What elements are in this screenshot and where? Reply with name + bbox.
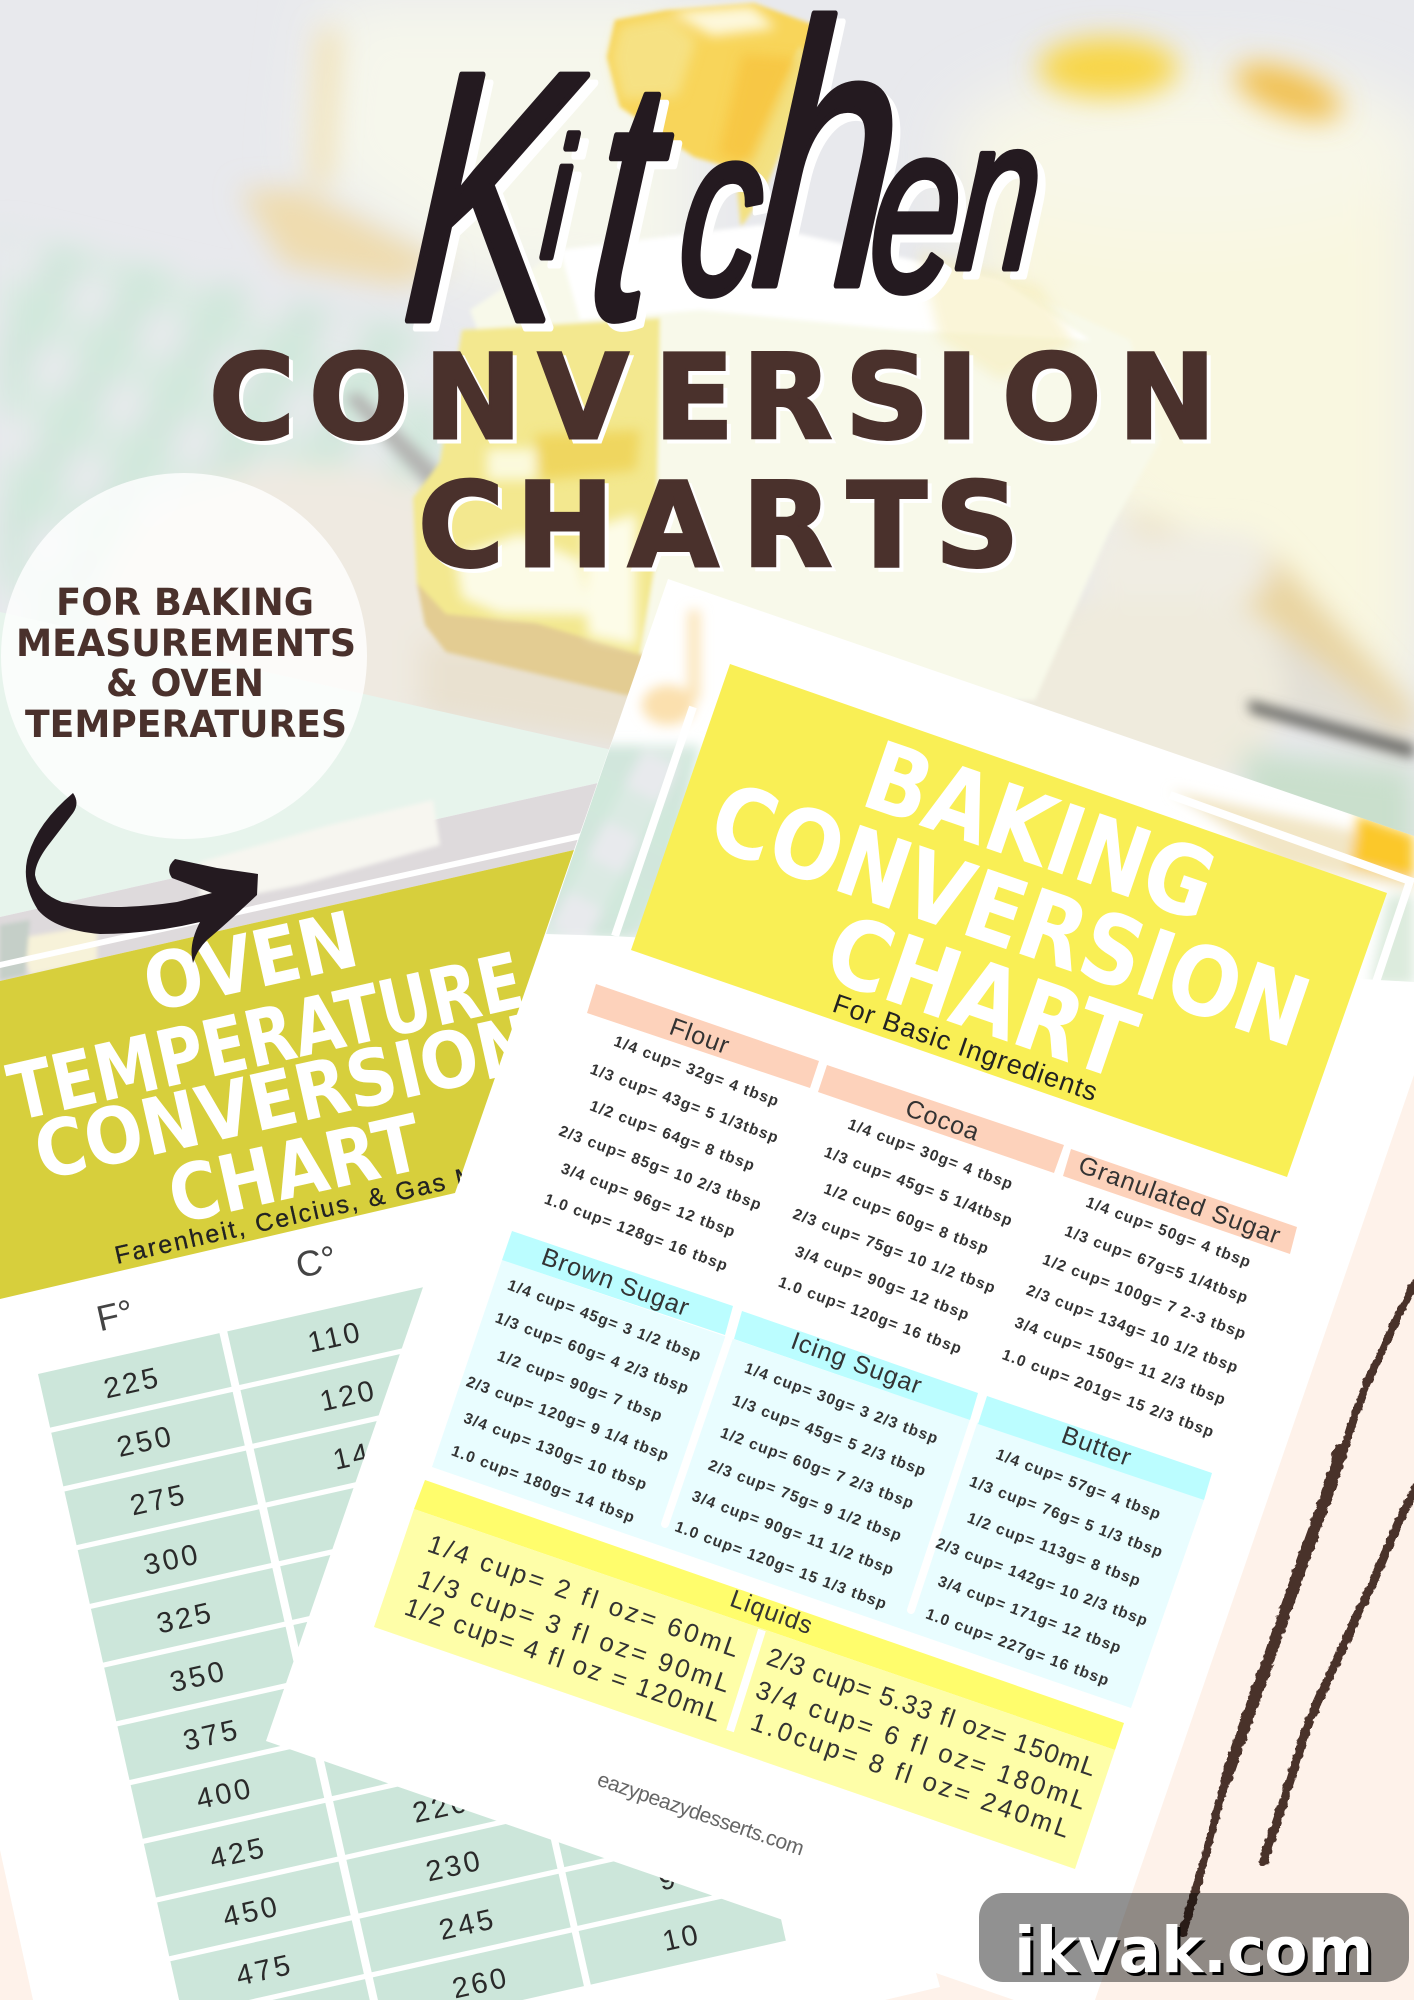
section: flour: Flour	[666, 1013, 734, 1060]
oven temperature table: 200	[396, 1727, 459, 1770]
title: Kitchen: e	[861, 73, 974, 342]
section: liquids	[374, 1480, 1124, 1869]
section: brown sugar: 1/3 cup= 60g= 4 2/3 tbsp	[493, 1310, 692, 1398]
website credit: eazypeazydesserts.com	[594, 1768, 807, 1860]
oven chart title text: CONVERSION	[26, 999, 544, 1199]
oven temperature table: 190	[383, 1668, 446, 1712]
decorative brush strokes	[1183, 1282, 1414, 1933]
section: granulated sugar: 1/3 cup= 67g=5 1/4tbsp	[1062, 1223, 1251, 1307]
callout circle: for baking measurements and oven temperatures	[1, 473, 367, 839]
section: granulated sugar: 1/4 cup= 50g= 4 tbsp	[1083, 1194, 1254, 1271]
baking title text: BAKING	[851, 720, 1229, 944]
title: conversion charts	[209, 329, 1216, 594]
oven temperature table: 350	[167, 1655, 230, 1699]
section: cocoa: Cocoa	[902, 1094, 984, 1147]
oven temperature table: 245	[436, 1903, 499, 1947]
oven temperature table: F°	[93, 1291, 137, 1339]
oven chart title text: CHART	[160, 1098, 430, 1243]
oven temperature table: 180	[370, 1609, 433, 1653]
oven chart subtitle: Farenheit, Celcius, & Gas Mark	[112, 1152, 522, 1270]
background photo: blurred cake	[0, 0, 1414, 1000]
section: granulated sugar: 1/2 cup= 100g= 7 2-3 tbsp	[1040, 1251, 1249, 1343]
title: Kitchen: n	[950, 74, 1052, 314]
baking title text: CONVERSION	[697, 761, 1323, 1070]
oven temperature table: 160	[357, 1551, 420, 1595]
section: flour: 3/4 cup= 96g= 12 tbsp	[559, 1160, 738, 1241]
section: granulated sugar	[1000, 1149, 1297, 1441]
oven temperature table: 140	[330, 1433, 393, 1477]
section: brown sugar: Brown Sugar	[538, 1243, 694, 1322]
section: cocoa: 3/4 cup= 90g= 12 tbsp	[793, 1243, 972, 1324]
oven temperature table: 475	[233, 1949, 296, 1993]
oven temperature table: 275	[127, 1479, 190, 1522]
title: conversion charts: CHARTS	[418, 457, 1019, 594]
section: cocoa: 1/4 cup= 30g= 4 tbsp	[845, 1116, 1016, 1193]
photo inner frame line	[615, 707, 693, 936]
title: Kitchen: i	[536, 103, 582, 293]
mint background panel	[0, 612, 612, 920]
oven temperature table: 220	[410, 1786, 473, 1830]
oven temperature table: 300	[141, 1538, 204, 1582]
section: liquids: 3/4 cup= 6 fl oz= 180mL	[752, 1674, 1090, 1816]
section: butter: 1.0 cup= 227g= 16 tbsp	[923, 1606, 1112, 1690]
title: conversion charts: CONVERSION	[209, 329, 1216, 466]
section: icing sugar: 1/4 cup= 30g= 3 2/3 tbsp	[742, 1360, 941, 1448]
oven temperature table: 425	[207, 1832, 270, 1876]
callout circle: for baking measurements and oven temperatures: & OVEN	[106, 662, 264, 705]
oven chart title text: OVEN	[135, 895, 366, 1031]
section: brown sugar: 1/2 cup= 90g= 7 tbsp	[495, 1348, 665, 1425]
oven temperature table: 225	[101, 1362, 164, 1405]
oven temperature table	[23, 1174, 786, 2000]
baking sheet photo band	[540, 610, 1414, 985]
section: brown sugar	[439, 1231, 733, 1530]
oven temperature table: 150	[344, 1492, 407, 1536]
section: cocoa: 1/2 cup= 60g= 8 tbsp	[821, 1181, 992, 1258]
oven temperature table: 325	[154, 1597, 217, 1641]
section: cocoa: 1.0 cup= 120g= 16 tbsp	[776, 1274, 965, 1358]
oven temperature table: C°	[292, 1237, 340, 1286]
section: brown sugar: 3/4 cup= 130g= 10 tbsp	[461, 1410, 650, 1494]
pale blue ingredient panel	[432, 1260, 1204, 1708]
section: granulated sugar: 1.0 cup= 201g= 15 2/3 tbsp	[1000, 1346, 1217, 1441]
section: flour: 1/4 cup= 32g= 4 tbsp	[611, 1033, 782, 1110]
section: flour: 1/2 cup= 64g= 8 tbsp	[587, 1098, 758, 1175]
callout circle: for baking measurements and oven temperatures: MEASUREMENTS	[16, 622, 356, 665]
oven temperature table: 250	[114, 1420, 177, 1464]
oven sheet photo strip	[0, 783, 598, 981]
title: Kitchen: t	[578, 6, 684, 390]
section: butter: 3/4 cup= 171g= 12 tbsp	[936, 1573, 1124, 1657]
baking subtitle: For Basic Ingredients	[829, 988, 1103, 1108]
oven temperature table: 110	[305, 1316, 366, 1359]
section: flour: 2/3 cup= 85g= 10 2/3 tbsp	[556, 1123, 764, 1214]
oven chart title text: TEMPERATURE	[0, 937, 531, 1140]
section: granulated sugar: 2/3 cup= 134g= 10 1/2 tbsp	[1024, 1282, 1241, 1377]
watermark: ikvak.com	[1014, 1914, 1373, 1987]
section: granulated sugar: 3/4 cup= 150g= 11 2/3 tbsp	[1012, 1314, 1229, 1409]
oven chart title banner	[0, 850, 574, 1299]
section: brown sugar: 1/4 cup= 45g= 3 1/2 tbsp	[505, 1277, 704, 1365]
section: cocoa: 2/3 cup= 75g= 10 1/2 tbsp	[790, 1206, 998, 1297]
oven temperature table: 230	[423, 1845, 486, 1888]
section: icing sugar: 1/2 cup= 60g= 7 2/3 tbsp	[718, 1425, 917, 1513]
section: butter: 1/4 cup= 57g= 4 tbsp	[993, 1446, 1164, 1523]
section: butter: 2/3 cup= 142g= 10 2/3 tbsp	[933, 1535, 1151, 1630]
section: icing sugar: 2/3 cup= 75g= 9 1/2 tbsp	[706, 1457, 905, 1545]
section: liquids: 1/4 cup= 2 fl oz= 60mL	[424, 1528, 743, 1663]
section: liquids: 1.0cup= 8 fl oz= 240mL	[747, 1706, 1074, 1844]
oven chart title text	[0, 895, 544, 1243]
callout circle: for baking measurements and oven temperatures: FOR BAKING	[56, 581, 314, 624]
section: cocoa: 1/3 cup= 45g= 5 1/4tbsp	[822, 1144, 1015, 1230]
section: liquids: Liquids	[726, 1585, 817, 1640]
oven temperature table: 10	[660, 1918, 704, 1958]
title: Kitchen	[393, 0, 1063, 396]
section: cocoa	[766, 1065, 1064, 1362]
section: liquids: 1/2 cup= 4 fl oz = 120mL	[401, 1591, 725, 1728]
section: icing sugar: Icing Sugar	[787, 1327, 926, 1400]
section: butter: 1/2 cup= 113g= 8 tbsp	[965, 1510, 1144, 1590]
peach background panel	[0, 1000, 1414, 2000]
section: granulated sugar: Granulated Sugar	[1075, 1151, 1285, 1250]
oven temperature table: 400	[193, 1772, 256, 1816]
section: butter: Butter	[1058, 1421, 1136, 1472]
title: Kitchen: K	[393, 0, 599, 396]
section: icing sugar	[672, 1311, 978, 1613]
panel: oven temperature conversion chart sheet	[0, 783, 940, 2000]
section: icing sugar: 1.0 cup= 120g= 15 1/3 tbsp	[672, 1518, 890, 1613]
arrow pointing to the oven chart	[26, 793, 258, 963]
section: flour: 1.0 cup= 128g= 16 tbsp	[542, 1191, 731, 1275]
section: flour	[532, 984, 819, 1279]
section: brown sugar: 1.0 cup= 180g= 14 tbsp	[449, 1443, 638, 1527]
baking title text: CHART	[813, 893, 1150, 1102]
section: icing sugar: 1/3 cup= 45g= 5 2/3 tbsp	[730, 1392, 929, 1480]
oven temperature table: 120	[317, 1374, 380, 1418]
section: butter	[909, 1396, 1212, 1695]
oven temperature table: 450	[220, 1890, 283, 1934]
baking title banner	[631, 664, 1387, 1177]
slice of cake	[470, 225, 1160, 700]
section: flour: 1/3 cup= 43g= 5 1/3tbsp	[588, 1061, 781, 1147]
section: liquids: 2/3 cup= 5.33 fl oz= 150mL	[763, 1641, 1100, 1782]
watermark	[979, 1893, 1409, 1987]
title: Kitchen: c	[670, 76, 774, 345]
panel: baking conversion chart sheet	[266, 579, 1414, 2000]
oven temperature table: 375	[180, 1714, 243, 1758]
section: icing sugar: 3/4 cup= 90g= 11 1/2 tbsp	[690, 1488, 897, 1579]
callout circle: for baking measurements and oven temperatures: TEMPERATURES	[25, 703, 347, 746]
section: butter: 1/3 cup= 76g= 5 1/3 tbsp	[967, 1473, 1166, 1561]
section: brown sugar: 2/3 cup= 120g= 9 1/4 tbsp	[464, 1373, 672, 1465]
oven temperature table: 9	[656, 1862, 681, 1897]
section: liquids: 1/3 cup= 3 fl oz= 90mL	[414, 1563, 734, 1698]
